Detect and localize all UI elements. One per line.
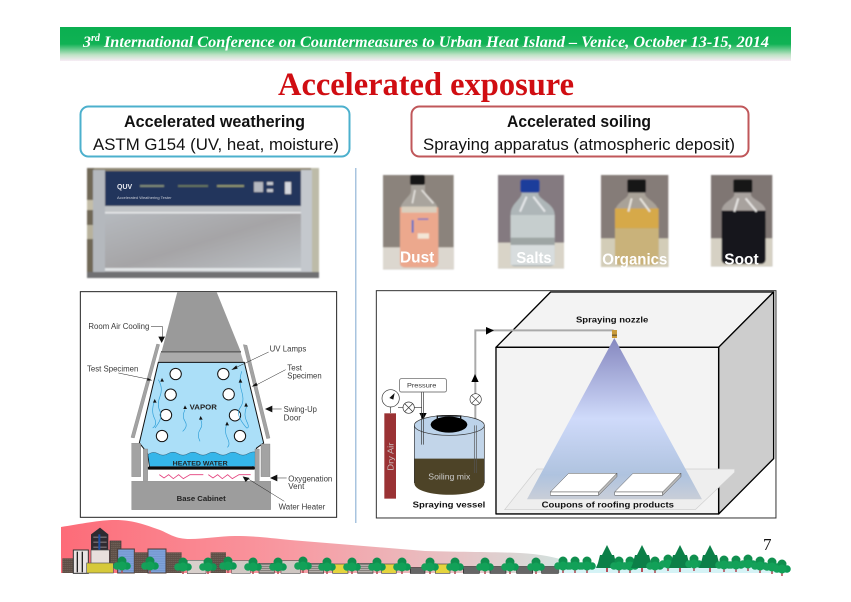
diagram captions: [413, 315, 674, 510]
chamber labels: Base Cabinet: [177, 494, 226, 503]
low buildings, centre: [435, 564, 558, 573]
heat island hill: [61, 520, 572, 573]
chart: spraying apparatus diagram: [376, 291, 776, 518]
panel: accelerated soiling heading: Accelerated soiling: [507, 112, 651, 131]
floor plate: [505, 469, 735, 510]
city buildings: [62, 528, 425, 574]
diagram captions: Coupons of roofing products: [542, 499, 674, 509]
conference line: rd: [91, 33, 101, 44]
gauge: [382, 390, 399, 407]
doors and walls: [131, 344, 271, 510]
spray chamber box: [496, 292, 774, 514]
photo: QUV weathering tester: [87, 168, 319, 278]
pressure box: Pressure: [407, 382, 437, 389]
photo: salts bottle: Salts: [516, 250, 552, 267]
chamber labels: HEATED WATER: [173, 460, 228, 467]
photo: salts bottle: [498, 175, 564, 268]
chamber labels: [173, 403, 228, 503]
diagram captions: Spraying nozzle: [576, 315, 648, 325]
pressure box: [400, 379, 446, 392]
diagram labels: Vent: [288, 482, 305, 491]
photo: dust bottle: [383, 175, 454, 269]
diagram captions: Spraying vessel: [413, 500, 485, 510]
hood: [158, 292, 244, 362]
footer: city to forest skyline: [61, 520, 791, 576]
vessel pipes: [390, 391, 476, 473]
diagram labels: Test Specimen: [87, 364, 138, 373]
photo: soot bottle: Soot: [724, 252, 759, 269]
dry air cylinder: Dry Air: [386, 443, 396, 471]
conference line: 3: [82, 34, 91, 51]
heater: [159, 475, 251, 479]
vapor wisps: [153, 371, 248, 447]
divider: [355, 168, 356, 523]
page number: 7: [763, 535, 772, 554]
forest: [554, 545, 791, 576]
UV lamps: [156, 368, 246, 442]
spraying vessel: Soiling mix: [428, 471, 471, 481]
photo: organics bottle: Organics: [602, 251, 667, 268]
vapor arrowheads: [153, 378, 248, 425]
diagram labels: Test: [287, 363, 303, 372]
panel: soiling agents photos: [383, 175, 772, 269]
nozzle: [612, 330, 617, 338]
water chamber: [139, 362, 264, 470]
panel: accelerated weathering heading: [80, 106, 350, 156]
diagram labels: Oxygenation: [288, 474, 332, 483]
photo: QUV weathering tester: Accelerated Weathering Tester: [117, 195, 172, 200]
street trees: [113, 556, 545, 574]
chamber labels: VAPOR: [190, 403, 218, 412]
ground tint under forest: [560, 566, 788, 573]
photo: soot bottle: [711, 175, 772, 269]
panel: accelerated soiling heading: [412, 106, 748, 156]
feed pipe: [475, 330, 614, 475]
spray cone: [527, 338, 702, 499]
panel: accelerated soiling heading: Spraying apparatus (atmospheric deposit): [423, 135, 735, 154]
diagram labels: Specimen: [287, 371, 322, 380]
diagram labels: Door: [284, 413, 301, 422]
chart: QUV chamber cross-section diagram: [80, 292, 337, 517]
panel: accelerated weathering heading: Accelerated weathering: [124, 112, 305, 131]
header banner: [60, 27, 791, 61]
diagram labels: Room Air Cooling: [88, 322, 149, 331]
photo: organics bottle: [601, 175, 668, 268]
dry air cylinder: [384, 413, 396, 499]
diagram labels: Swing-Up: [284, 405, 318, 414]
diagram labels: UV Lamps: [270, 345, 306, 354]
photo: dust bottle: Dust: [400, 250, 435, 267]
panel: accelerated weathering heading: ASTM G154 (UV, heat, moisture): [93, 135, 339, 154]
diagram labels: [87, 322, 332, 512]
label arrowheads: [147, 337, 277, 482]
conference line: International Conference on Countermeasures to Urban Heat Island – Venice, October 13-15, 2014: [103, 34, 769, 51]
title: Accelerated exposure: [278, 67, 574, 103]
photo: QUV weathering tester: QUV: [117, 184, 132, 191]
label arrows: [118, 326, 287, 501]
valves: [403, 394, 481, 413]
coupons: [550, 473, 681, 495]
diagram labels: Water Heater: [279, 503, 326, 512]
flow arrows: [419, 327, 494, 420]
spraying vessel: [414, 415, 484, 495]
